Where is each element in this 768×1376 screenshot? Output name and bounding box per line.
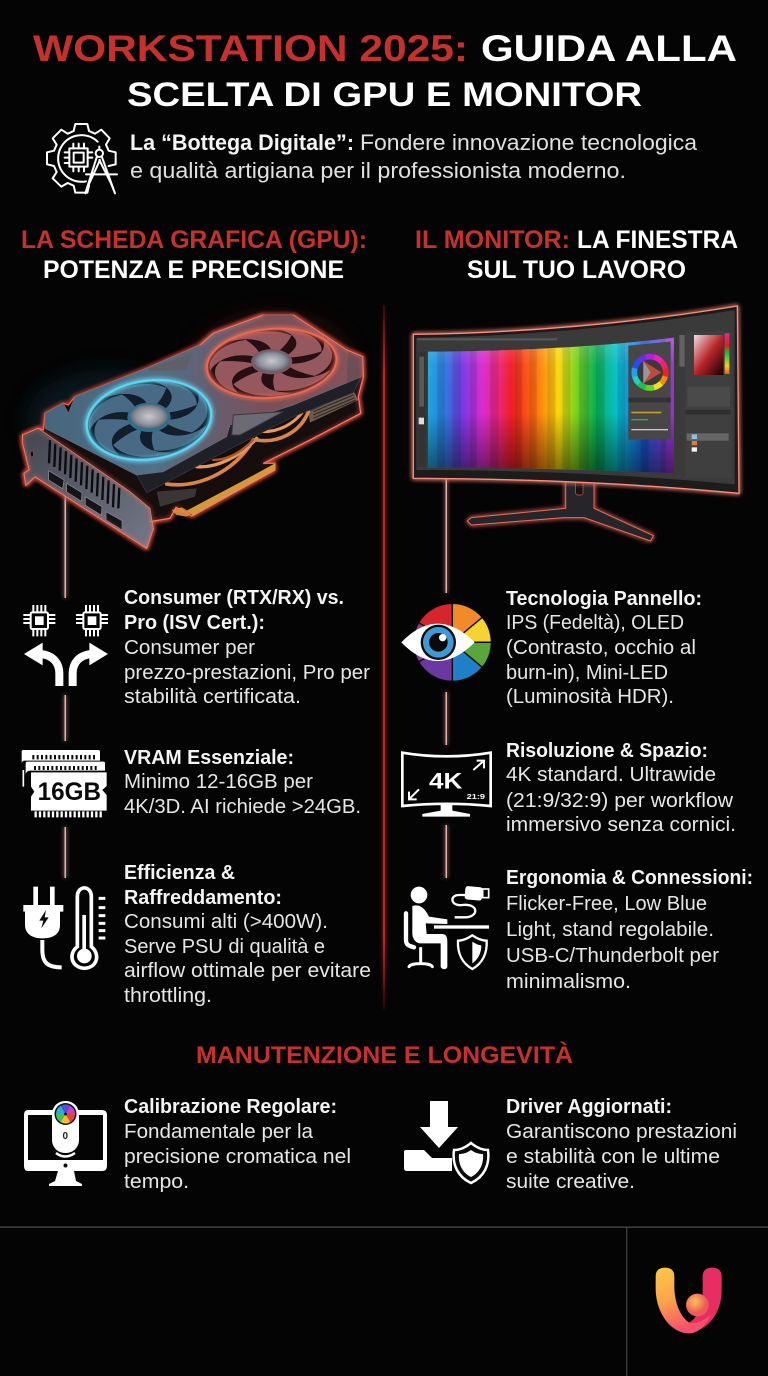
- intro text: e qualità artigiana per il professionista moderno.: [130, 158, 626, 183]
- text: Consumer per: [124, 636, 255, 659]
- monitor stand: [467, 480, 653, 541]
- icon: memory modules 16GB: 16GB: [38, 778, 101, 806]
- toolbar: [417, 335, 685, 467]
- connector lines: monitor column: [446, 478, 447, 878]
- text: 4K/3D. AI richiede >24GB.: [124, 795, 361, 818]
- text: [506, 866, 753, 993]
- title: [33, 28, 737, 114]
- text: e stabilità con le ultime: [506, 1145, 720, 1168]
- text: immersivo senza cornici.: [506, 813, 736, 836]
- text: precisione cromatica nel: [124, 1145, 351, 1168]
- text: 4K standard. Ultrawide: [506, 763, 716, 786]
- title: GUIDA ALLA: [481, 28, 737, 69]
- intro text: Fondere innovazione tecnologica: [360, 130, 698, 155]
- red fan: [195, 314, 355, 410]
- maintenance item: calibration: [24, 1095, 351, 1193]
- text: Efficienza &: [124, 861, 235, 884]
- heading: GPU column: [21, 226, 367, 284]
- text: airflow ottimale per evitare: [124, 959, 371, 982]
- text: Raffreddamento:: [124, 886, 282, 909]
- colour panel: [628, 342, 672, 440]
- text: Light, stand regolabile.: [506, 918, 714, 941]
- title: WORKSTATION 2025:: [33, 28, 468, 69]
- text: minimalismo.: [506, 970, 631, 993]
- text: VRAM Essenziale:: [124, 746, 294, 769]
- text: (Luminosità HDR).: [506, 685, 674, 708]
- text: [124, 1095, 351, 1193]
- text: tempo.: [124, 1170, 189, 1193]
- title: SCELTA DI GPU E MONITOR: [127, 76, 642, 114]
- icon: person at desk with USB cable and shield: [406, 886, 489, 969]
- monitor item 2: resolution: [402, 739, 736, 836]
- icon: memory modules 16GB: [22, 750, 107, 817]
- right side panels: [686, 332, 732, 478]
- screen chrome: [416, 310, 735, 484]
- icon: plug and thermometer: [23, 887, 105, 968]
- text: Serve PSU di qualità e: [124, 935, 325, 958]
- GPU item 1: consumer vs pro: [23, 586, 370, 708]
- text: Calibrazione Regolare:: [124, 1095, 337, 1118]
- icon: gear with chip and compass: [47, 124, 117, 193]
- text: USB-C/Thunderbolt per: [506, 944, 719, 967]
- icon: 4K ultrawide monitor: 4K: [429, 768, 462, 793]
- footer lines: [0, 1226, 768, 1376]
- text: prezzo-prestazioni, Pro per: [124, 661, 370, 684]
- GPU item 3: efficiency and cooling: [23, 861, 371, 1007]
- text: Fondamentale per la: [124, 1120, 314, 1143]
- text: Tecnologia Pannello:: [506, 587, 702, 610]
- text: [124, 586, 370, 708]
- text: (Contrasto, occhio al: [506, 636, 696, 659]
- illustration: ultrawide monitor: [413, 306, 739, 541]
- connector lines: GPU column: [64, 495, 66, 878]
- text: Consumi alti (>400W).: [124, 910, 328, 933]
- logo: [656, 1268, 722, 1333]
- text: Risoluzione & Spazio:: [506, 739, 708, 762]
- intro text: La “Bottega Digitale”:: [130, 130, 354, 155]
- heading: maintenance: MANUTENZIONE E LONGEVITÀ: [196, 1041, 573, 1069]
- text: [506, 1095, 737, 1193]
- text: [124, 861, 371, 1007]
- blue fan: [72, 362, 233, 476]
- heading: GPU column: LA SCHEDA GRAFICA (GPU):: [21, 226, 367, 254]
- monitor item 1: panel technology: [401, 587, 702, 708]
- text: stabilità certificata.: [124, 685, 301, 708]
- text: throttling.: [124, 984, 212, 1007]
- intro text: [130, 130, 698, 183]
- icon: eye on colour wheel: [401, 603, 491, 681]
- icon: chips and diverging arrows: [23, 605, 108, 686]
- text: IPS (Fedeltà), OLED: [506, 611, 684, 634]
- icon: 4K ultrawide monitor: 21:9: [467, 792, 485, 801]
- maintenance item: drivers: [404, 1095, 737, 1193]
- heading: monitor column: SUL TUO LAVORO: [467, 256, 686, 284]
- text: Flicker-Free, Low Blue: [506, 892, 707, 915]
- monitor frame: [413, 306, 739, 493]
- rainbow canvas: [428, 338, 674, 473]
- heading: monitor column: [415, 226, 738, 284]
- icon: monitor with colorimeter: 0: [62, 1131, 68, 1142]
- monitor item 3: ergonomics: [406, 866, 753, 993]
- heading: monitor column: LA FINESTRA: [577, 226, 738, 254]
- text: burn-in), Mini-LED: [506, 661, 668, 684]
- text: Pro (ISV Cert.):: [124, 611, 265, 634]
- text: Ergonomia & Connessioni:: [506, 866, 753, 889]
- text: Consumer (RTX/RX) vs.: [124, 586, 344, 609]
- text: Garantiscono prestazioni: [506, 1120, 737, 1143]
- heading: monitor column: IL MONITOR:: [415, 226, 570, 254]
- text: Minimo 12-16GB per: [124, 770, 313, 793]
- heading: GPU column: POTENZA E PRECISIONE: [43, 256, 344, 284]
- text: (21:9/32:9) per workflow: [506, 789, 733, 812]
- illustration: graphics card: [23, 313, 363, 548]
- text: [506, 739, 736, 836]
- icon: 4K ultrawide monitor: [402, 753, 491, 817]
- bracket and ports: [23, 428, 153, 548]
- icon: download arrow, folder and shield: [404, 1101, 488, 1183]
- GPU item 2: VRAM: [22, 746, 361, 818]
- text: Driver Aggiornati:: [506, 1095, 672, 1118]
- text: suite creative.: [506, 1170, 635, 1193]
- icon: monitor with colorimeter: [24, 1101, 107, 1186]
- text: [506, 587, 702, 708]
- center divider: [383, 305, 385, 1010]
- text: [124, 746, 361, 818]
